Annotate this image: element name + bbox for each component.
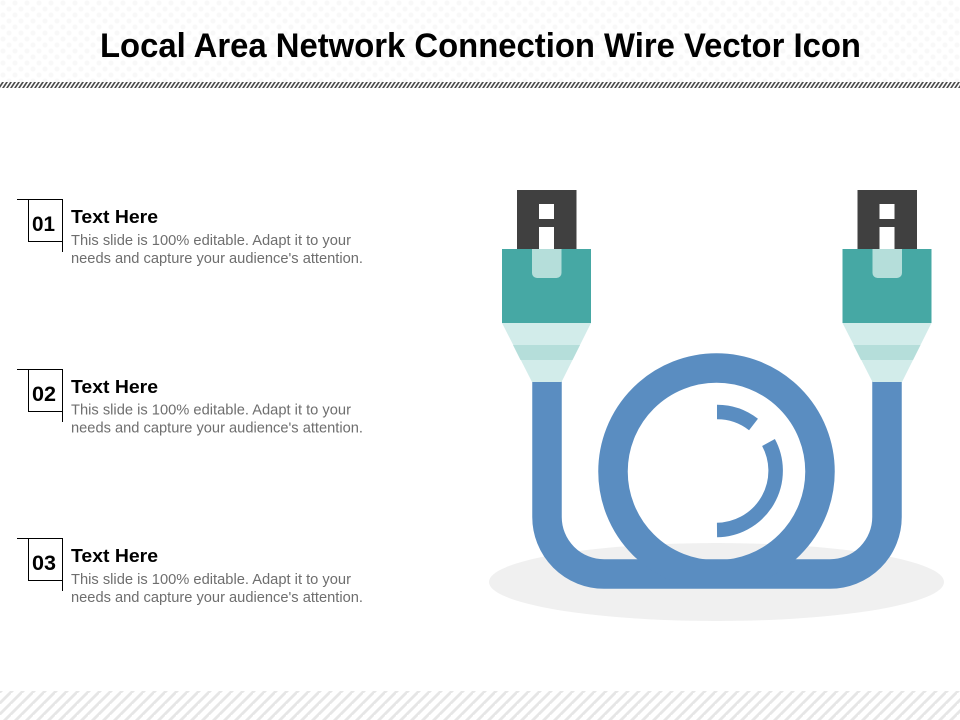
body text 03: This slide is 100% editable. Adapt it to your (71, 572, 351, 588)
list item 02 (17, 370, 363, 436)
title: Local Area Network Connection Wire Vector Icon (100, 27, 861, 65)
number badge 03 (17, 538, 62, 591)
body text 02: needs and capture your audience's attention. (71, 420, 363, 436)
list item 01 (17, 200, 363, 267)
number badge 02 (17, 370, 62, 422)
cable highlight arcs (717, 412, 776, 530)
right connector (842, 190, 932, 382)
body text 01 (71, 233, 363, 267)
body text 02 (71, 402, 363, 436)
footer band (0, 691, 960, 720)
header band (0, 0, 960, 88)
body text 02: This slide is 100% editable. Adapt it to your (71, 402, 351, 418)
number badge 01: 01 (32, 213, 55, 236)
number badge 01 (17, 200, 62, 252)
heading 01: Text Here (71, 207, 158, 227)
number badge 03: 03 (32, 552, 56, 575)
heading 03: Text Here (71, 546, 158, 566)
body text 01: needs and capture your audience's attention. (71, 251, 363, 267)
body text 01: This slide is 100% editable. Adapt it to your (71, 233, 351, 249)
number badge 02: 02 (32, 383, 56, 406)
body text 03 (71, 572, 363, 606)
cable wire (547, 368, 887, 575)
icon: network cable (489, 190, 944, 621)
left connector (502, 190, 591, 382)
ground shadow (489, 543, 944, 621)
heading 02: Text Here (71, 377, 158, 397)
body text 03: needs and capture your audience's attention. (71, 590, 363, 606)
list item 03 (17, 538, 363, 606)
